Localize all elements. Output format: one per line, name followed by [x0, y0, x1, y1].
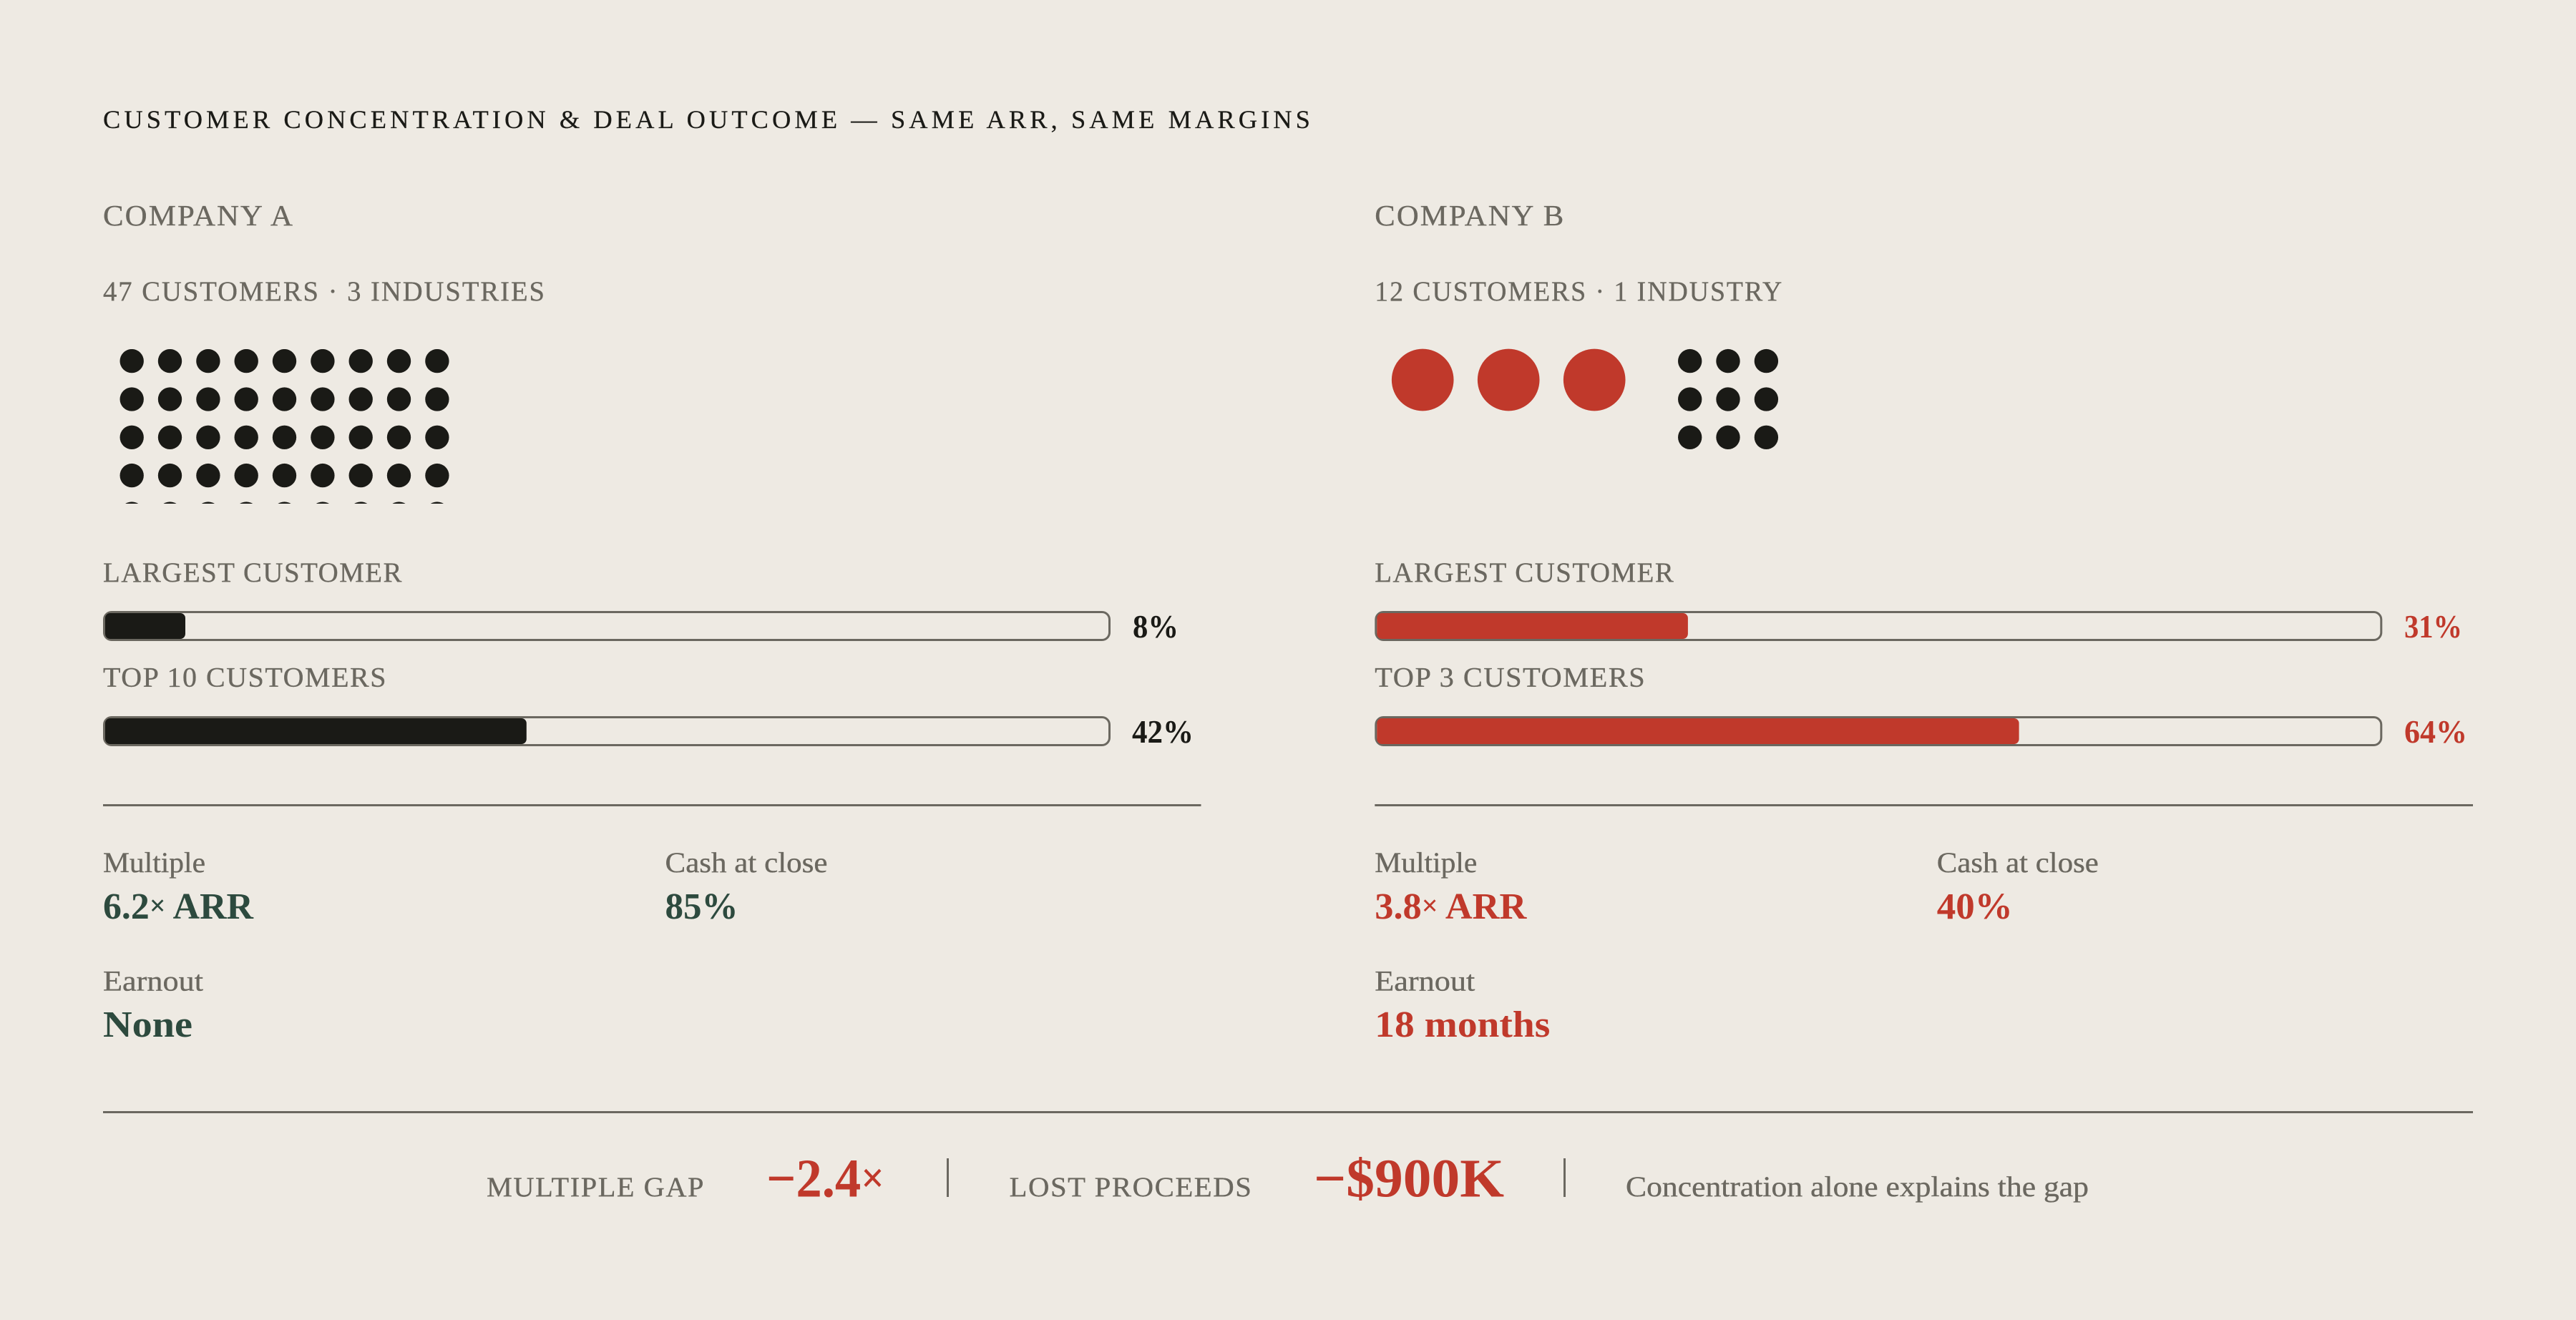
subheading: customers and industries: 47 CUSTOMERS · 3 INDUSTRIES: [103, 276, 546, 307]
infographic canvas: [103, 111, 2473, 1203]
metric: multiple: Multiple: [103, 846, 205, 879]
heading: company B: COMPANY B: [1375, 199, 1565, 232]
metric: cash at close: Cash at close: [665, 846, 827, 879]
metric: multiple: ARR: [166, 886, 254, 927]
metric: earnout: 18 months: [1375, 1004, 1550, 1045]
label: top 10 customers: TOP 10 CUSTOMERS: [103, 663, 387, 693]
metric: multiple: Multiple: [1375, 846, 1477, 879]
value: 8%: 8%: [1133, 609, 1179, 645]
metric: multiple: ×: [1422, 889, 1438, 921]
panel: company A: [103, 199, 1201, 1045]
metric: multiple: 3.8: [1375, 886, 1421, 927]
dot group: 9 small customers: [1678, 349, 1778, 449]
bar: top 10 customers 42%: [104, 717, 1109, 745]
bar: largest customer 8%: [104, 612, 1109, 640]
bar: largest customer 31%: [1376, 612, 2381, 640]
summary strip: [487, 1149, 2089, 1209]
value: 64%: 64%: [2404, 714, 2467, 750]
label: top 3 customers: TOP 3 CUSTOMERS: [1375, 663, 1646, 693]
metric: earnout: [103, 964, 203, 1045]
heading: company A: COMPANY A: [103, 199, 294, 232]
metric: multiple: [103, 846, 254, 927]
metric: earnout: [1375, 964, 1550, 1045]
label: largest customer: LARGEST CUSTOMER: [103, 557, 403, 588]
metric: multiple: ARR: [1438, 886, 1528, 927]
panel: company B: [1375, 199, 2473, 1045]
label: largest customer: LARGEST CUSTOMER: [1375, 557, 1674, 588]
value: 42%: 42%: [1132, 714, 1194, 750]
metric: multiple: ×: [150, 889, 166, 921]
dot group: 3 large customers: [1392, 349, 1626, 411]
metric: cash at close: [665, 846, 827, 927]
metric: earnout: None: [103, 1004, 192, 1045]
label: multiple gap: MULTIPLE GAP: [487, 1172, 705, 1203]
value: multiple gap: ×: [861, 1155, 884, 1202]
title: CUSTOMER CONCENTRATION & DEAL OUTCOME — SAME ARR, SAME MARGINS: [103, 105, 1314, 134]
value: 31%: 31%: [2404, 609, 2462, 645]
value: lost proceeds: −$900K: [1314, 1149, 1504, 1209]
label: lost proceeds: LOST PROCEEDS: [1009, 1172, 1252, 1203]
metric: cash at close: 40%: [1937, 886, 2013, 927]
dot grid: 47 customers, clipped: [120, 349, 449, 504]
bar: top 3 customers 64%: [1376, 717, 2381, 745]
metric: multiple: 6.2: [103, 886, 150, 927]
metric: multiple: [1375, 846, 1528, 927]
metric: earnout: Earnout: [103, 964, 203, 997]
subheading: customers and industry: 12 CUSTOMERS · 1 INDUSTRY: [1375, 276, 1783, 307]
value: multiple gap: −2.4: [766, 1149, 865, 1209]
metric: cash at close: [1937, 846, 2099, 927]
metric: cash at close: 85%: [665, 886, 738, 927]
metric: earnout: Earnout: [1375, 964, 1475, 997]
metric: cash at close: Cash at close: [1937, 846, 2099, 879]
takeaway note: Concentration alone explains the gap: [1626, 1170, 2089, 1203]
